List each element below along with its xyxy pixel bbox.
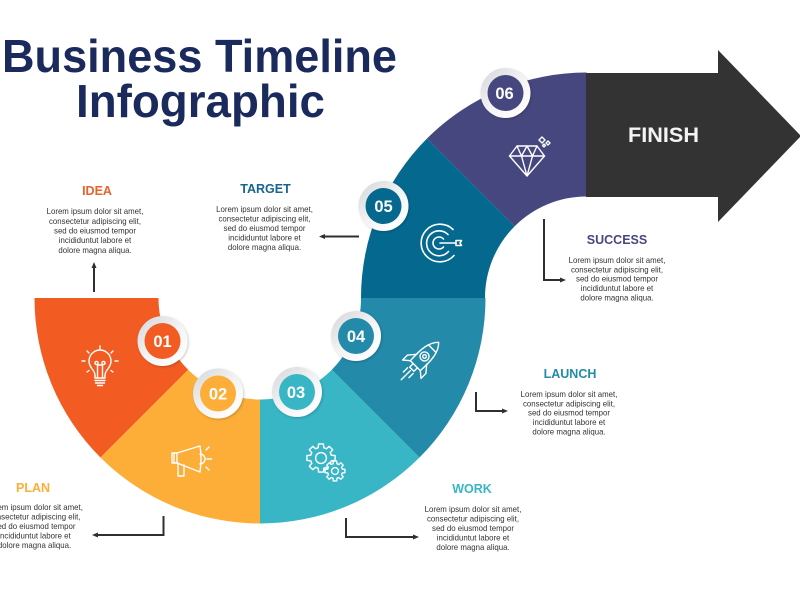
badge 02 bbox=[193, 368, 243, 418]
finish arrow bbox=[586, 50, 800, 222]
callout: idea bbox=[47, 184, 143, 292]
callout: success: consectetur adipiscing elit, bbox=[571, 265, 663, 274]
callout: plan: dolore magna aliqua. bbox=[0, 541, 71, 550]
callout: plan: incididuntut labore et bbox=[0, 532, 72, 540]
icon: megaphone bbox=[172, 446, 212, 476]
callout: launch: dolore magna aliqua. bbox=[532, 427, 606, 436]
callout: idea: Lorem ipsum dolor sit amet, bbox=[47, 207, 143, 216]
badge 01: 01 bbox=[153, 333, 172, 351]
segment 03 bbox=[260, 370, 420, 524]
icon: target bbox=[421, 224, 462, 262]
callout: idea: IDEA bbox=[82, 184, 112, 198]
callout: idea: consectetur adipiscing elit, bbox=[49, 217, 141, 226]
callout: success: incididuntut labore et bbox=[581, 284, 654, 293]
badge 02: 02 bbox=[209, 386, 227, 404]
callout: success: SUCCESS bbox=[587, 233, 647, 247]
badge 04: 04 bbox=[347, 328, 366, 346]
callout: work: Lorem ipsum dolor sit amet, bbox=[425, 505, 521, 514]
callout: work: sed do eiusmod tempor bbox=[432, 524, 514, 533]
callout: target: incididuntut labore et bbox=[228, 234, 302, 242]
segment 05 bbox=[361, 138, 515, 298]
callout: success bbox=[544, 219, 665, 302]
callout: success: sed do eiusmod tempor bbox=[576, 275, 658, 284]
callout: work: incididuntut labore et bbox=[437, 534, 510, 542]
badge 04 bbox=[331, 311, 381, 361]
callout: launch: incididuntut labore et bbox=[533, 418, 606, 427]
callout: work bbox=[346, 482, 521, 552]
callout: launch: Lorem ipsum dolor sit amet, bbox=[521, 390, 617, 399]
callout: plan: PLAN bbox=[16, 481, 50, 495]
segment 04 bbox=[332, 298, 486, 458]
segment 01 bbox=[34, 298, 188, 458]
callout: work: dolore magna aliqua. bbox=[436, 543, 510, 552]
finish arrow: FINISH bbox=[628, 124, 699, 147]
badge 05 bbox=[358, 181, 408, 231]
callout: success: dolore magna aliqua. bbox=[580, 293, 654, 302]
callout: target: dolore magna aliqua. bbox=[228, 243, 301, 252]
callout: plan bbox=[0, 481, 164, 550]
title bbox=[2, 30, 397, 127]
icon: diamond bbox=[510, 137, 550, 176]
icon: light bulb bbox=[82, 346, 118, 386]
icon: rocket bbox=[392, 333, 448, 389]
title: Infographic bbox=[76, 75, 325, 127]
badge 01 bbox=[138, 316, 188, 366]
callout: launch: consectetur adipiscing elit, bbox=[523, 399, 615, 408]
callout: target: consectetur adipiscing elit, bbox=[218, 214, 310, 224]
callout: target: TARGET bbox=[240, 182, 291, 196]
callout: launch: LAUNCH bbox=[544, 367, 596, 381]
badge 06 bbox=[480, 68, 530, 118]
icon: gears bbox=[307, 444, 345, 481]
segment 02 bbox=[100, 370, 260, 524]
callout: launch bbox=[476, 367, 617, 436]
callout: target: sed do eiusmod tempor bbox=[224, 224, 306, 233]
segment 06 bbox=[427, 72, 586, 226]
callout: idea: dolore magna aliqua. bbox=[58, 246, 132, 255]
callout: target bbox=[216, 182, 359, 252]
badge 06: 06 bbox=[495, 85, 514, 103]
callout: target: Lorem ipsum dolor sit amet, bbox=[216, 205, 313, 214]
callout: launch: sed do eiusmod tempor bbox=[528, 409, 610, 418]
callout: success: Lorem ipsum dolor sit amet, bbox=[569, 256, 665, 265]
callout: idea: incididuntut labore et bbox=[59, 236, 132, 245]
callout: idea: sed do eiusmod tempor bbox=[54, 226, 136, 236]
badge 03 bbox=[272, 367, 322, 417]
callout: work: WORK bbox=[452, 482, 492, 496]
badge 05: 05 bbox=[374, 198, 393, 216]
title: Business Timeline bbox=[2, 30, 397, 82]
badge 03: 03 bbox=[287, 384, 305, 402]
callout: work: consectetur adipiscing elit, bbox=[427, 514, 519, 524]
